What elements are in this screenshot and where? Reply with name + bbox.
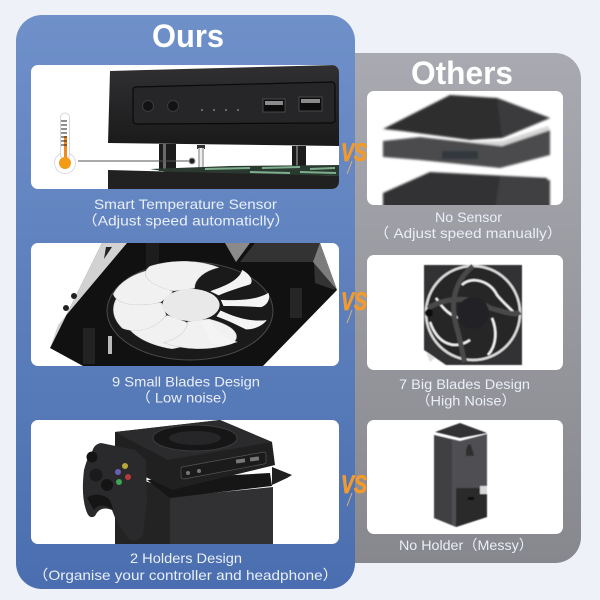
heading: others: Others: [411, 55, 513, 91]
caption: seven blades: （High Noise）: [416, 392, 516, 408]
vs badge: row two: [341, 288, 367, 323]
vs badge: row one: [341, 139, 367, 174]
vs badge: row three: [341, 471, 367, 506]
sensor pointer line: [78, 158, 195, 164]
caption: nine blades: [112, 374, 260, 406]
caption: temperature sensor: （Adjust speed automaticlly）: [82, 212, 290, 228]
card: holders: [31, 420, 339, 544]
panel: others: [355, 53, 581, 563]
card: no holder tower: [367, 420, 563, 534]
caption: temperature sensor: [82, 196, 290, 228]
card: nine blade fan: [31, 243, 339, 366]
caption: no sensor: [374, 209, 562, 241]
icon: game controller: [82, 443, 147, 518]
icon: thermometer: [54, 113, 76, 174]
caption: holders: [33, 550, 338, 583]
caption: no sensor: （ Adjust speed manually）: [374, 225, 562, 241]
fan housing ring: [107, 262, 273, 360]
vs badge: row three: VS: [341, 471, 367, 499]
panel: ours: [16, 15, 355, 589]
card: no sensor product: [367, 91, 563, 210]
caption: nine blades: （ Low noise）: [136, 390, 236, 406]
heading: ours: Ours: [152, 18, 224, 54]
caption: no holder: No Holder（Messy）: [399, 537, 533, 553]
caption: seven blades: [399, 376, 530, 408]
caption: seven blades: 7 Big Blades Design: [399, 376, 530, 392]
fan rotor: [113, 261, 270, 349]
caption: holders: 2 Holders Design: [130, 550, 242, 566]
vs badge: row one: VS: [341, 139, 367, 167]
card: temperature sensor: [31, 65, 339, 189]
caption: nine blades: 9 Small Blades Design: [112, 374, 260, 390]
product: sensor device: [108, 65, 339, 189]
card: seven blade fan: [367, 255, 563, 370]
product: console with cooler: [115, 420, 292, 544]
caption: temperature sensor: Smart Temperature Sensor: [94, 196, 277, 212]
vs badge: row two: VS: [341, 288, 367, 316]
caption: no sensor: No Sensor: [435, 209, 502, 225]
caption: holders: （Organise your controller and headphone）: [33, 567, 338, 583]
